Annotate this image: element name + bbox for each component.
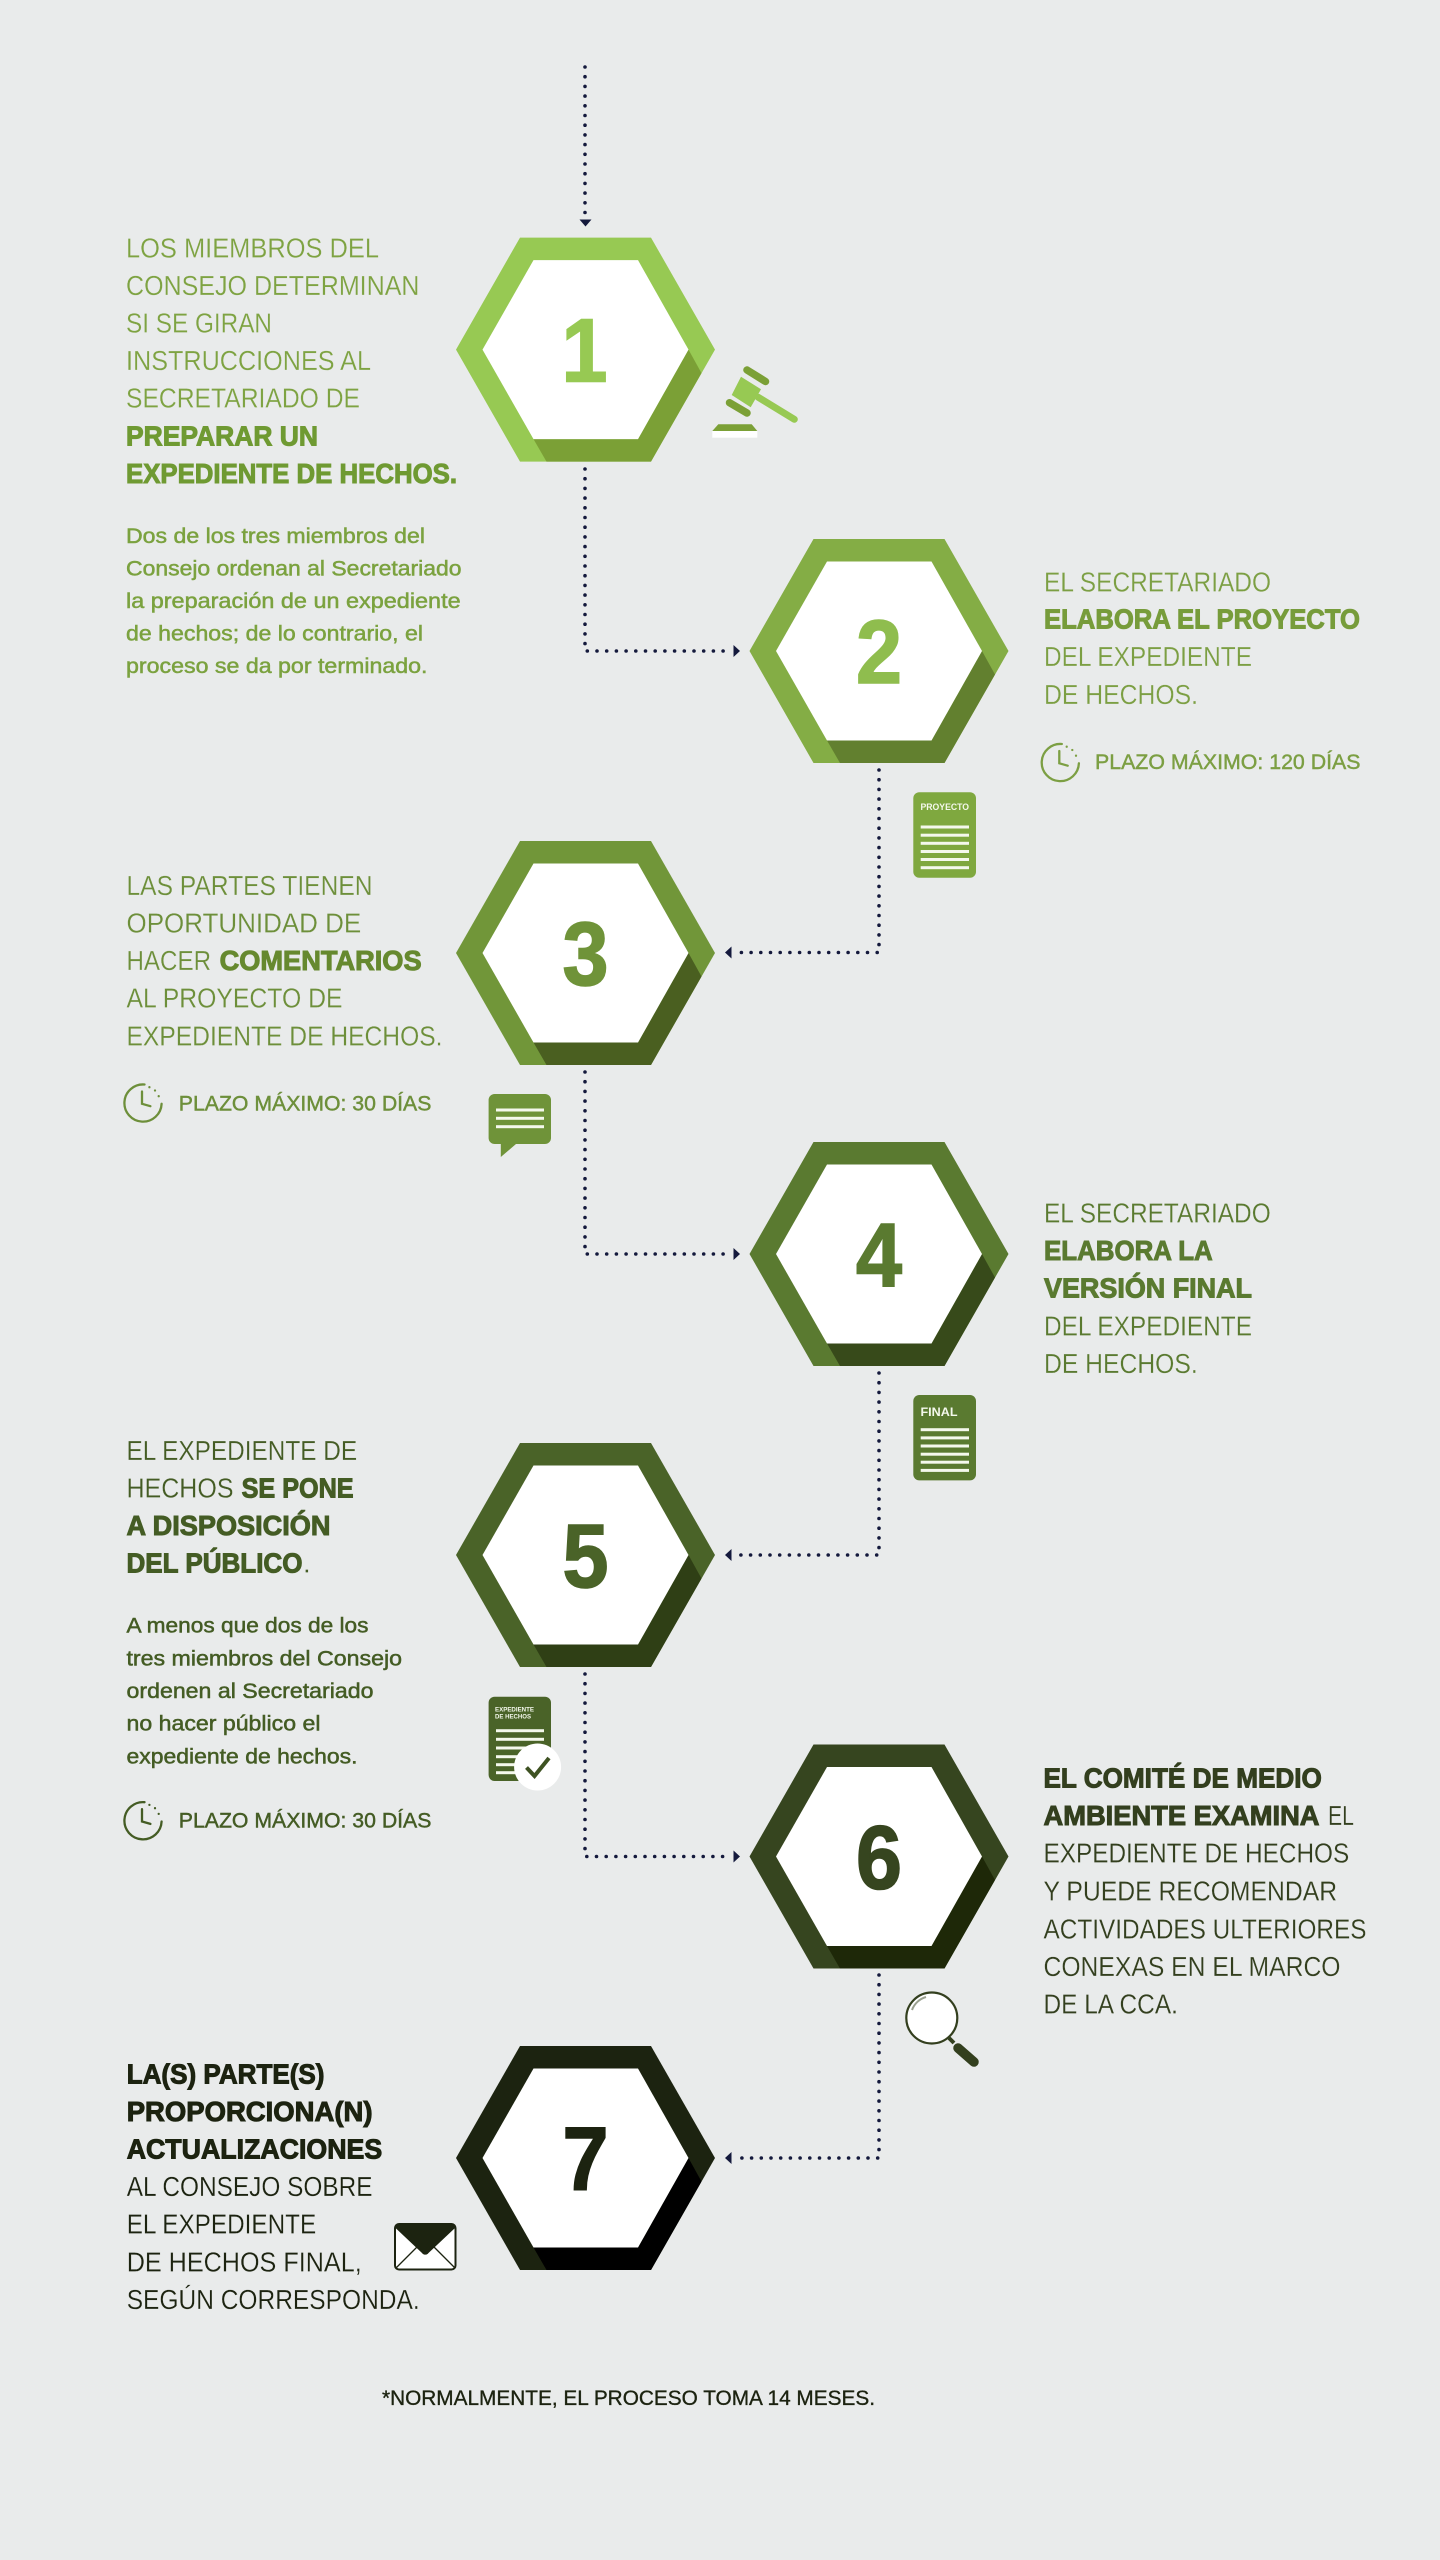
text: step 7: AL CONSEJO SOBRE: [127, 2171, 372, 2202]
arrow: step 4 to step 5: [725, 1373, 879, 1561]
text: step 5 heading: HECHOS: [126, 1472, 234, 1503]
text: step 1 heading: EXPEDIENTE DE HECHOS.: [126, 458, 457, 489]
hexagon: step 1: 1: [562, 302, 608, 402]
text: step 1 detail: Dos de los tres miembros del: [126, 525, 425, 548]
text: step 4: DEL EXPEDIENTE: [1044, 1310, 1252, 1341]
icon: envelope: [395, 2224, 456, 2270]
text: step 3: EXPEDIENTE DE HECHOS.: [126, 1020, 442, 1051]
hexagon: step 6: 6: [856, 1808, 902, 1908]
text: step 2: EL SECRETARIADO: [1044, 567, 1271, 598]
text: step 3: OPORTUNIDAD DE: [126, 908, 361, 939]
text: step 1 detail: Consejo ordenan al Secretariado: [126, 557, 461, 580]
icon: final document: FINAL: [920, 1407, 958, 1419]
hexagon: step 6: [750, 1744, 1008, 1968]
text: step 7: EL EXPEDIENTE: [127, 2209, 316, 2240]
hexagon: step 3: 3: [562, 905, 608, 1005]
text: step 6: EL COMITÉ DE MEDIO: [1044, 1762, 1322, 1793]
arrow: step 6 to step 7: [725, 1975, 879, 2164]
deadline: 30 days, step 3: [124, 1084, 431, 1122]
icon: gavel: [712, 370, 794, 438]
text: step 7: LA(S) PARTE(S): [127, 2058, 324, 2089]
arrow: entry to step 1: [580, 67, 592, 226]
icon: published document with check: EXPEDIENTE: [495, 1707, 535, 1714]
footnote: *NORMALMENTE, EL PROCESO TOMA 14 MESES.: [382, 2386, 875, 2410]
text: step 6: DE LA CCA.: [1044, 1989, 1178, 2020]
text: step 5 heading: [126, 1435, 357, 1579]
text: step 5 detail: ordenen al Secretariado: [126, 1680, 374, 1703]
icon: comment bubble: [489, 1094, 551, 1157]
text: step 7: [127, 2058, 420, 2315]
text: step 6: EXPEDIENTE DE HECHOS: [1044, 1838, 1349, 1869]
hexagon: step 4: [750, 1142, 1008, 1366]
hexagon: step 2: 2: [856, 603, 902, 703]
text: step 6: Y PUEDE RECOMENDAR: [1044, 1876, 1337, 1907]
text: step 4: EL SECRETARIADO: [1044, 1198, 1271, 1229]
deadline: 30 days, step 5: PLAZO MÁXIMO: 30 DÍAS: [179, 1810, 431, 1833]
hexagon: step 7: 7: [562, 2110, 608, 2210]
text: step 1 heading: PREPARAR UN: [126, 420, 318, 451]
text: step 7: ACTUALIZACIONES: [127, 2133, 382, 2164]
text: step 4: ELABORA LA: [1044, 1235, 1213, 1266]
text: step 6: [1044, 1762, 1366, 2020]
text: step 7: DE HECHOS FINAL,: [127, 2246, 362, 2277]
text: step 5 detail: A menos que dos de los: [126, 1615, 368, 1638]
text: step 3: LAS PARTES TIENEN: [126, 870, 372, 901]
text: step 1 heading: SECRETARIADO DE: [126, 383, 360, 414]
text: step 3: AL PROYECTO DE: [126, 983, 342, 1014]
text: step 2: ELABORA EL PROYECTO: [1044, 603, 1360, 634]
text: step 6: AMBIENTE EXAMINA: [1044, 1800, 1320, 1831]
deadline: 120 days: [1042, 744, 1360, 781]
text: step 1 heading: LOS MIEMBROS DEL: [126, 233, 379, 264]
text: step 4: DE HECHOS.: [1044, 1348, 1198, 1379]
text: step 5 heading: .: [303, 1548, 311, 1579]
text: step 6: CONEXAS EN EL MARCO: [1044, 1951, 1340, 1982]
text: step 7: PROPORCIONA(N): [127, 2096, 372, 2127]
deadline: 30 days, step 3: PLAZO MÁXIMO: 30 DÍAS: [179, 1093, 431, 1116]
text: step 2: DE HECHOS.: [1044, 679, 1198, 710]
hexagon: step 5: 5: [562, 1507, 608, 1607]
text: step 2: [1044, 567, 1360, 710]
text: step 1 detail: la preparación de un expediente: [126, 590, 461, 613]
text: step 5 detail: expediente de hechos.: [126, 1745, 358, 1768]
text: step 3: COMENTARIOS: [220, 945, 422, 976]
text: step 3: [126, 870, 442, 1051]
text: step 1 detail: proceso se da por terminado.: [126, 655, 428, 678]
icon: draft document: PROYECTO: [920, 802, 969, 813]
text: step 5 heading: DEL PÚBLICO: [126, 1548, 302, 1579]
hexagon: step 3: [456, 841, 715, 1065]
text: step 1 heading: CONSEJO DETERMINAN: [126, 270, 420, 301]
text: step 1 heading: INSTRUCCIONES AL: [126, 345, 371, 376]
text: step 7: SEGÚN CORRESPONDA.: [127, 2284, 420, 2315]
text: step 2: DEL EXPEDIENTE: [1044, 641, 1252, 672]
arrow: step 2 to step 3: [725, 770, 879, 958]
text: step 6: EL: [1328, 1800, 1354, 1831]
text: step 6: ACTIVIDADES ULTERIORES: [1044, 1913, 1366, 1944]
text: step 1 heading: SI SE GIRAN: [126, 308, 272, 339]
text: step 5 heading: EL EXPEDIENTE DE: [126, 1435, 357, 1466]
icon: draft document: [913, 792, 976, 878]
text: step 5 detail: tres miembros del Consejo: [126, 1647, 402, 1670]
deadline: 120 days: PLAZO MÁXIMO: 120 DÍAS: [1095, 751, 1360, 774]
icon: final document: [913, 1395, 976, 1480]
text: step 1 detail: de hechos; de lo contrario, el: [126, 623, 423, 646]
arrow: step 5 to step 6: [585, 1674, 740, 1862]
hexagon: step 7: [456, 2046, 715, 2270]
hexagon: step 1: [456, 238, 715, 462]
hexagon: step 2: [750, 539, 1008, 763]
text: step 4: VERSIÓN FINAL: [1044, 1273, 1252, 1304]
text: step 5 detail: no hacer público el: [126, 1713, 320, 1736]
text: step 5 heading: A DISPOSICIÓN: [126, 1510, 330, 1541]
arrow: step 3 to step 4: [585, 1072, 740, 1260]
hexagon: step 5: [456, 1443, 715, 1667]
text: step 5 detail: [126, 1615, 402, 1768]
text: step 1 detail: [126, 525, 461, 678]
text: step 3: HACER: [126, 945, 211, 976]
deadline: 30 days, step 5: [124, 1802, 431, 1839]
icon: magnifying glass: [906, 1992, 974, 2062]
text: step 4: [1044, 1198, 1271, 1379]
hexagon: step 4: 4: [856, 1206, 902, 1306]
text: step 5 heading: SE PONE: [242, 1472, 354, 1503]
text: step 1 heading: [126, 233, 457, 489]
icon: published document with check: DE HECHOS: [495, 1714, 532, 1720]
icon: published document with check: [489, 1697, 561, 1790]
arrow: step 1 to step 2: [585, 469, 740, 657]
